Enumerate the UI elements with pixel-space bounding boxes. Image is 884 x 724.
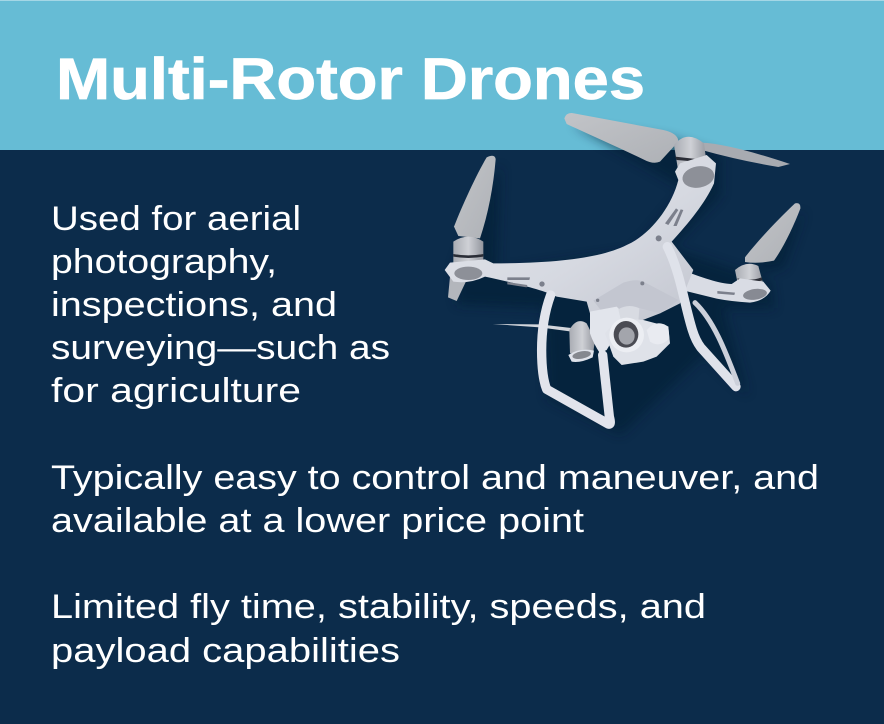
text block: uses: for agriculture	[51, 372, 301, 410]
text block: limitations: payload capabilities	[51, 632, 400, 670]
main body and arms	[445, 155, 716, 330]
drone illustration	[445, 113, 804, 435]
motor lens: top	[681, 164, 716, 190]
text block: uses: inspections, and	[51, 286, 337, 324]
text block: uses: Used for aerial	[51, 200, 301, 238]
propeller: right blade	[745, 203, 800, 263]
underbody plate	[593, 280, 678, 313]
header band	[0, 0, 884, 150]
text block: limitations: Limited fly time, stability, speeds, and	[51, 588, 706, 626]
header top edge	[0, 0, 884, 1]
text block: control and price	[51, 459, 819, 540]
motor lens: right	[742, 287, 768, 301]
text block: uses: surveying—such as	[51, 329, 390, 367]
title: Multi-Rotor Drones	[56, 47, 645, 112]
camera gimbal	[590, 306, 670, 365]
text block: limitations	[51, 588, 706, 670]
right landing gear	[667, 247, 736, 387]
propeller: left lower blade stub	[448, 277, 467, 301]
left landing gear	[542, 295, 610, 424]
right landing gear rear strut	[695, 303, 738, 383]
propeller: thin front blade	[493, 324, 577, 332]
text block: control and price: available at a lower price point	[51, 502, 585, 540]
right arm	[682, 270, 771, 303]
vents	[507, 208, 735, 302]
text block: control and price: Typically easy to control and maneuver, and	[51, 459, 819, 497]
motor: left	[453, 237, 483, 263]
propeller: top right blade	[702, 143, 790, 167]
motor: top	[674, 137, 707, 172]
small rear motor	[568, 321, 595, 362]
text block: uses: photography,	[51, 243, 277, 281]
motor lens: left	[454, 267, 482, 280]
drone shadow	[454, 125, 804, 435]
motor: right	[735, 264, 764, 287]
propeller: top main blade	[564, 113, 678, 163]
propeller: left upper blade	[454, 156, 496, 238]
text block: uses	[51, 200, 390, 410]
